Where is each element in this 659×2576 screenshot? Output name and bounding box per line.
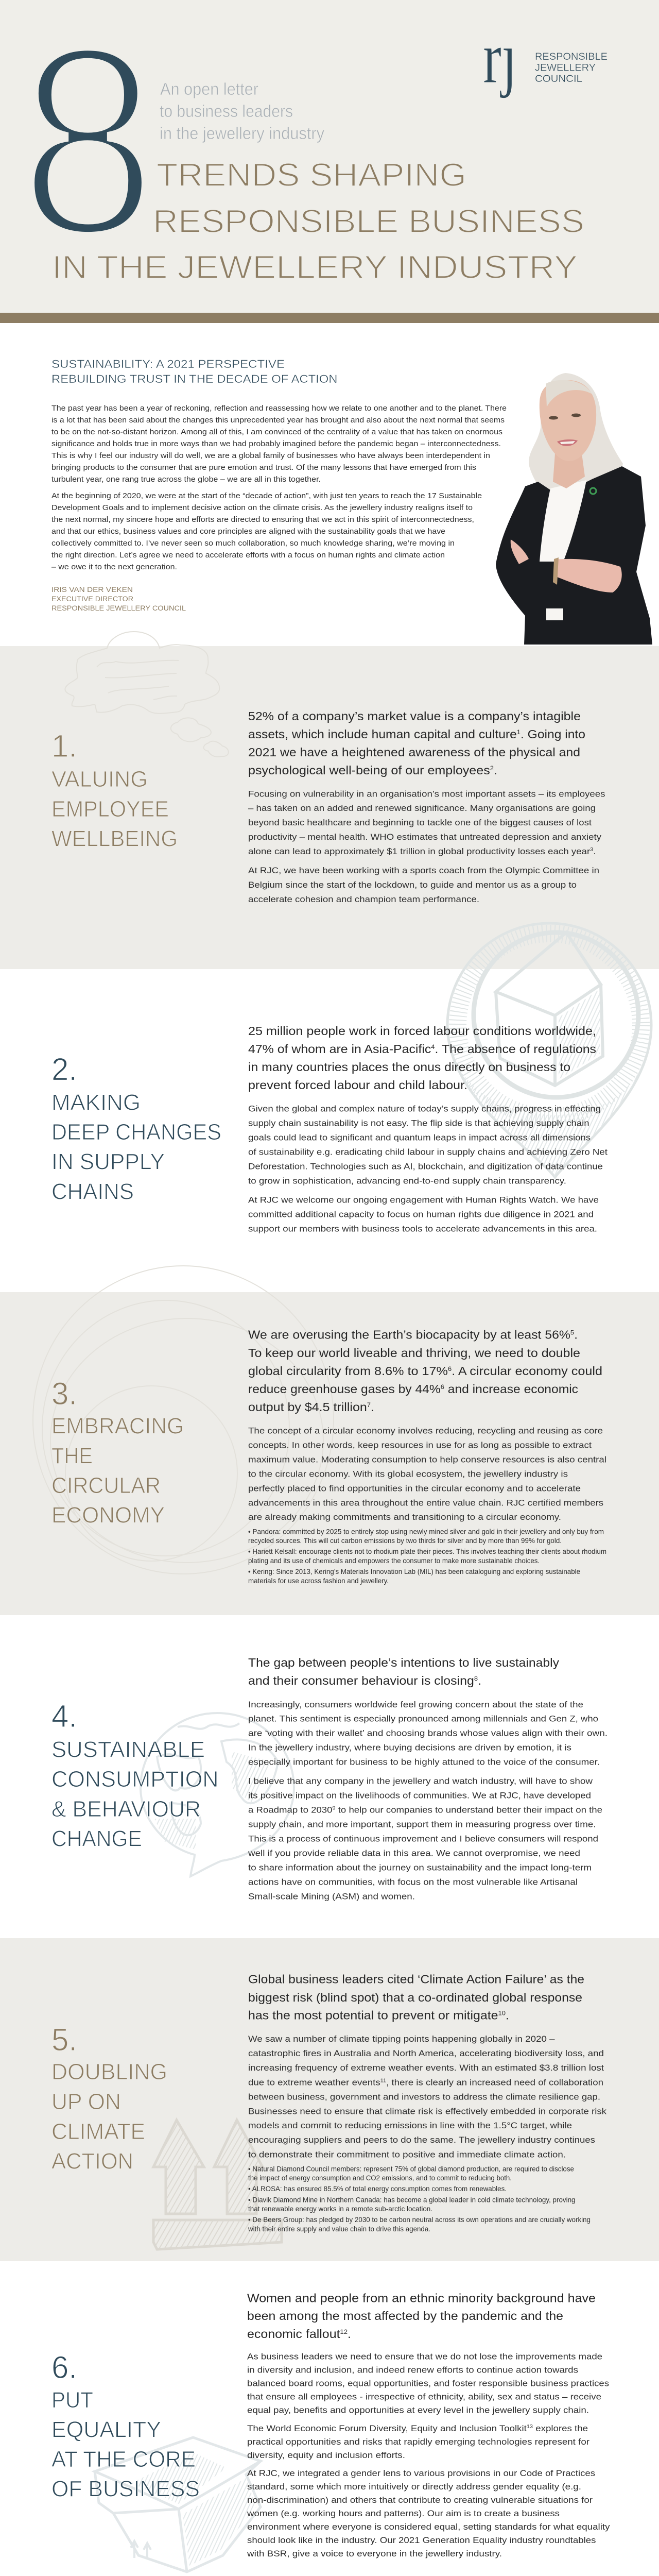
section 6 lead statement: economic fallout bbox=[247, 2327, 333, 2341]
section 5 lead statement: biggest risk (blind spot) that a co-ordinated global response bbox=[248, 1991, 582, 2004]
section 5 heading: UP ON bbox=[51, 2089, 121, 2114]
section 4 body text: to share information about the journey on sustainability and the impact long-term bbox=[248, 1863, 592, 1872]
section 3 heading bbox=[51, 1376, 184, 1528]
section 3 heading: ECONOMY bbox=[51, 1502, 165, 1528]
section 3 body text: The concept of a circular economy involves reducing, recycling and reusing as core bbox=[248, 1426, 603, 1435]
section 1 lead statement bbox=[248, 709, 585, 777]
signature: RESPONSIBLE JEWELLERY COUNCIL bbox=[51, 604, 186, 612]
section 3 member examples: materials for use across fashion and jewellery. bbox=[248, 1577, 389, 1585]
section 4 body text: especially important for business to be highly attuned to the voice of the consumer. bbox=[248, 1757, 600, 1767]
section 5 member examples: • ALROSA: has ensured 85.5% of total energy consumption comes from renewables. bbox=[248, 2184, 507, 2193]
section 6 body text: At RJC, we integrated a gender lens to various provisions in our Code of Practices bbox=[247, 2468, 595, 2478]
icon: diamond ring location pin bbox=[447, 923, 651, 1177]
section 1 body text: Focusing on vulnerability in an organisation’s most important assets – its employees bbox=[248, 789, 605, 799]
section 5 body text: models and commit to reducing emissions in line with the 1.5°C target, while bbox=[248, 2121, 572, 2130]
section 6 heading: 6. bbox=[51, 2350, 77, 2385]
section 6 heading: AT THE CORE bbox=[51, 2447, 196, 2472]
section 5 heading bbox=[51, 2022, 167, 2174]
section 2 lead statement bbox=[248, 1024, 596, 1092]
section 3 lead statement: and increase economic bbox=[444, 1382, 578, 1396]
section 6 body text: in diversity and inclusion, and indeed renew efforts to continue action towards bbox=[247, 2365, 578, 2375]
section 2 body text bbox=[248, 1104, 608, 1233]
section 2 heading: MAKING bbox=[51, 1090, 141, 1115]
section 5 member examples: with their entire supply and value chain to drive this agenda. bbox=[248, 2225, 430, 2233]
section 6 body text: with BSR, give a voice to everyone in the jewellery industry. bbox=[247, 2549, 502, 2558]
section 1 body text: accelerate cohesion and champion team performance. bbox=[248, 894, 479, 904]
section 3 lead statement: 5 bbox=[570, 1329, 574, 1336]
section 1 lead statement: 52% of a company’s market value is a company’s intagible bbox=[248, 709, 581, 723]
section 6 heading: PUT bbox=[51, 2387, 93, 2413]
section 5 lead statement: . bbox=[506, 2008, 509, 2022]
photo: portrait of Iris Van Der Veken bbox=[496, 373, 652, 645]
section 5 body text: catastrophic fires in Australia and North America, accelerating biodiversity loss, and bbox=[248, 2048, 604, 2058]
section 5 lead statement bbox=[248, 1972, 584, 2022]
section 5 heading: DOUBLING bbox=[51, 2059, 167, 2084]
section 4 heading: SUSTAINABLE bbox=[51, 1737, 205, 1762]
section 6 lead statement: Women and people from an ethnic minority background have bbox=[247, 2292, 596, 2305]
intro heading: SUSTAINABILITY: A 2021 PERSPECTIVE bbox=[51, 358, 285, 370]
section 3 heading: CIRCULAR bbox=[51, 1473, 161, 1498]
section 1 heading bbox=[51, 728, 178, 851]
logo: Responsible Jewellery Council: rȷ bbox=[483, 17, 517, 99]
section 4 body text: are ‘voting with their wallet’ and choosing brands whose values align with their own. bbox=[248, 1728, 608, 1738]
section 4 body text: planet. This sentiment is especially pronounced among millennials and Gen Z, who bbox=[248, 1714, 598, 1724]
intro letter text bbox=[51, 404, 507, 571]
section 2 body text: goals could lead to significant and quantum leaps in impact across all dimensions bbox=[248, 1132, 591, 1143]
section 4 lead statement: . bbox=[478, 1674, 481, 1687]
section 3 heading: 3. bbox=[51, 1376, 77, 1411]
section 5 heading: 5. bbox=[51, 2022, 77, 2057]
section 4 lead statement: and their consumer behaviour is closing bbox=[248, 1674, 457, 1687]
section 5 member examples: • De Beers Group: has pledged by 2030 to be carbon neutral across its own operations and are crucially working bbox=[248, 2215, 591, 2224]
section 2 lead statement: . The absence of regulations bbox=[435, 1042, 596, 1056]
section 6 lead statement: 12 bbox=[340, 2328, 348, 2335]
intro letter text: collectively committed to. I’ve never seen so much collaboration, so much knowledge sharing, we’re moving in bbox=[51, 539, 455, 548]
section 4 body text: its positive impact on the livelihoods of communities. We at RJC, have developed bbox=[248, 1791, 591, 1800]
section 2 lead statement: in many countries places the onus directly on business to bbox=[248, 1060, 570, 1074]
section 4 lead statement bbox=[248, 1656, 560, 1687]
section 4 heading: CHANGE bbox=[51, 1826, 142, 1852]
section 3 lead statement: 6 bbox=[448, 1365, 452, 1372]
section 1 heading: VALUING bbox=[51, 767, 148, 792]
intro letter text: is a lot that has been said about the changes this unprecedented year has brought and also about the next normal that seems bbox=[51, 416, 505, 425]
section 1 lead statement: 2 bbox=[490, 765, 494, 772]
section 3 lead statement: output by $4.5 trillion bbox=[248, 1400, 357, 1414]
section 1 body text: alone can lead to approximately $1 trillion in global productivity losses each year bbox=[248, 846, 559, 856]
section 1 body text: productivity – mental health. WHO estimates that untreated depression and anxiety bbox=[248, 832, 602, 842]
section 1 heading: 1. bbox=[51, 728, 77, 764]
section 6 body text: diversity, equity and inclusion efforts. bbox=[247, 2450, 405, 2460]
header: open letter strapline bbox=[160, 79, 324, 143]
section 6 body text: explores the bbox=[533, 2424, 588, 2433]
section 3 lead statement: . bbox=[574, 1328, 578, 1342]
section 3 body text: are already making commitments and transitioning to a circular economy. bbox=[248, 1512, 561, 1522]
section 5 body text: , there is clearly an increased need of collaboration bbox=[386, 2077, 603, 2088]
section 4 body text: actions have on communities, with focus on the most vulnerable like Artisanal bbox=[248, 1877, 578, 1887]
section 5 lead statement: Global business leaders cited ‘Climate Action Failure’ as the bbox=[248, 1972, 584, 1986]
section 5 body text: 11 bbox=[380, 2078, 387, 2083]
section 6 body text: As business leaders we need to ensure that we do not lose the improvements made bbox=[247, 2351, 602, 2362]
logo: Responsible Jewellery Council: COUNCIL bbox=[535, 74, 582, 84]
section 5 member examples: the impact of energy consumption and CO2 emissions, and to commit to reducing both. bbox=[248, 2174, 512, 2182]
intro letter text: At the beginning of 2020, we were at the start of the “decade of action”, with just ten years to reach the 17 Sustainable bbox=[51, 492, 482, 500]
signature: EXECUTIVE DIRECTOR bbox=[51, 595, 133, 603]
header: title bbox=[52, 157, 584, 285]
section 5 member examples: that renewable energy works in a remote sub-arctic location. bbox=[248, 2205, 432, 2213]
section 5 body text: We saw a number of climate tipping points happening globally in 2020 – bbox=[248, 2034, 555, 2044]
section 3 lead statement: global circularity from 8.6% to 17% bbox=[248, 1364, 430, 1378]
section 2 lead statement: 47% of whom are in Asia-Pacific bbox=[248, 1042, 418, 1056]
section 1 lead statement: . Going into bbox=[521, 727, 585, 741]
section 3 lead statement: To keep our world liveable and thriving, we need to double bbox=[248, 1346, 580, 1360]
section 3 body text bbox=[248, 1426, 606, 1522]
section 6 lead statement: been among the most affected by the pandemic and the bbox=[247, 2309, 563, 2323]
section 5 body text: Businesses need to ensure that climate risk is effectively embedded in corporate risk bbox=[248, 2106, 607, 2116]
section 1 body text: . bbox=[593, 846, 596, 856]
intro letter text: the right direction. Let’s agree we need to accelerate efforts with a focus on human rights and climate action bbox=[51, 551, 445, 560]
intro letter text: the next normal, my sincere hope and efforts are directed to ensuring that we act in this spirit of interconnectedness, bbox=[51, 515, 474, 524]
section 5 lead statement: 10 bbox=[498, 2009, 506, 2016]
section 4 body text: Increasingly, consumers worldwide feel growing concern about the state of the bbox=[248, 1700, 583, 1709]
section 6 body text: women (e.g. working hours and patterns). Our aim is to create a business bbox=[247, 2509, 560, 2518]
section 1 body text: At RJC, we have been working with a sports coach from the Olympic Committee in bbox=[248, 866, 599, 875]
section 5 body text: to demonstrate their commitment to positive and immediate climate action. bbox=[248, 2149, 566, 2160]
section 3 body text: advancements in this area throughout the entire value chain. RJC certified members bbox=[248, 1498, 603, 1507]
intro letter text: This is why I feel our industry will do well, we are a global family of businesses who have always been interdependent in bbox=[51, 451, 490, 460]
intro letter text: and that our ethics, business values and core principles are aligned with the sustainability goals that we have bbox=[51, 527, 445, 536]
intro letter text: significance and holds true in more ways than we had probably imagined before the pandemic began – interconnectedness. bbox=[51, 439, 501, 448]
section 3 member examples: • Kering: Since 2013, Kering’s Materials Innovation Lab (MIL) has been cataloguing and exploring sustainable bbox=[248, 1567, 580, 1575]
intro letter text: bringing products to the consumer that are pure emotion and trust. Of the many lessons that have emerged from this bbox=[51, 463, 476, 472]
section 2 heading: CHAINS bbox=[51, 1179, 134, 1205]
section 6 body text: that ensure all employees - irrespective of ethnicity, ability, sex and status – receive bbox=[247, 2392, 601, 2402]
section 6 body text: environment where everyone is considered equal, setting standards for what equality bbox=[247, 2522, 610, 2532]
header: open letter strapline: An open letter bbox=[160, 79, 258, 98]
section 3 body text: concepts. In other words, keep resources in use for as long as possible to extract bbox=[248, 1440, 592, 1450]
section 1 lead statement: . bbox=[494, 764, 497, 777]
intro letter text: Development Goals and to implement decisive action on the climate crisis. As the jewellery industry realigns itself to bbox=[51, 503, 473, 512]
section 3 member examples: recycled sources. This will cut carbon emissions by two thirds for silver and by more than 99% for gold. bbox=[248, 1536, 562, 1545]
section 3 lead statement: We are overusing the Earth’s biocapacity by at least 56% bbox=[248, 1328, 547, 1342]
section 6 body text: non-discrimination) and others that contribute to creating vulnerable situations for bbox=[247, 2495, 593, 2505]
section 3 lead statement: 6 bbox=[441, 1383, 444, 1391]
section 1 lead statement: assets, which include human capital and culture bbox=[248, 727, 499, 741]
section 4 body text bbox=[248, 1700, 608, 1901]
section 2 body text: Deforestation. Technologies such as AI, blockchain, and digitization of data continue bbox=[248, 1161, 603, 1172]
section 6 body text: balanced board rooms, equal opportunities, and foster responsible business practices bbox=[247, 2378, 609, 2388]
section 6 body text: 13 bbox=[527, 2424, 533, 2430]
section 1 heading: WELLBEING bbox=[51, 826, 178, 851]
section 2 lead statement: prevent forced labour and child labour. bbox=[248, 1078, 467, 1092]
logo: Responsible Jewellery Council bbox=[483, 17, 608, 99]
icon: open cardboard box bbox=[95, 2437, 261, 2572]
section 6 lead statement: . bbox=[348, 2327, 351, 2341]
section 6 heading: EQUALITY bbox=[51, 2417, 161, 2442]
icon: rising arrows on a box bbox=[153, 2120, 282, 2249]
signature bbox=[51, 585, 186, 612]
section 2 body text: supply chain sustainability is not easy. The flip side is that achieving supply chain bbox=[248, 1118, 589, 1128]
section 4 heading: 4. bbox=[51, 1699, 77, 1734]
section 1 body text: beyond basic healthcare and beginning to tackle one of the biggest causes of lost bbox=[248, 818, 592, 827]
section 1 heading: EMPLOYEE bbox=[51, 796, 169, 822]
logo: Responsible Jewellery Council: JEWELLERY bbox=[535, 63, 596, 73]
section 1 lead statement: psychological well-being of our employees bbox=[248, 764, 470, 777]
section 2 heading bbox=[51, 1052, 221, 1205]
section 4 body text: This is a process of continuous improvement and I believe consumers will respond bbox=[248, 1834, 598, 1843]
section 5 body text: between business, government and investors to address the climate resilience gap. bbox=[248, 2092, 600, 2102]
section 1 body text: Belgium since the start of the lockdown, to guide and mentor us as a group to bbox=[248, 880, 577, 890]
section 3 lead statement: reduce greenhouse gases by 44% bbox=[248, 1382, 428, 1396]
section 2 body text: support our members with business tools to accelerate advancements in this area. bbox=[248, 1224, 597, 1233]
section 3 member examples: • Hariett Kelsall: encourage clients not to rhodium plate their pieces. This involves teaching their clients about rhodium bbox=[248, 1547, 606, 1555]
intro heading bbox=[51, 358, 338, 385]
section 2 heading: IN SUPPLY bbox=[51, 1149, 165, 1175]
section 4 lead statement: 8 bbox=[474, 1675, 478, 1682]
section 3 heading: THE bbox=[51, 1444, 93, 1468]
section 6 lead statement bbox=[247, 2292, 596, 2341]
section 5 body text: due to extreme weather events bbox=[248, 2077, 368, 2088]
signature: IRIS VAN DER VEKEN bbox=[51, 585, 133, 594]
section 4 body text: well if you provide reliable data in this area. We cannot overpromise, we need bbox=[248, 1849, 580, 1858]
section 1 body text: 3 bbox=[590, 847, 594, 853]
section 4 heading: & BEHAVIOUR bbox=[51, 1797, 201, 1822]
section 2 heading: DEEP CHANGES bbox=[51, 1120, 221, 1145]
section 2 body text: Given the global and complex nature of today’s supply chains, progress in effecting bbox=[248, 1104, 601, 1114]
icon: circular economy rings bbox=[33, 1266, 334, 1574]
section 3 lead statement: . bbox=[371, 1400, 374, 1414]
section 6 heading bbox=[51, 2350, 200, 2502]
section 4 body text: Small-scale Mining (ASM) and women. bbox=[248, 1892, 415, 1901]
section 4 body text: supply chain, and more important, support them in measuring progress over time. bbox=[248, 1820, 596, 1829]
header: title: IN THE JEWELLERY INDUSTRY bbox=[52, 249, 578, 285]
header: title: RESPONSIBLE BUSINESS bbox=[153, 204, 584, 240]
section 2 body text: to grow in sophistication, advancing end-to-end supply chain transparency. bbox=[248, 1176, 566, 1186]
section 2 lead statement: 4 bbox=[431, 1043, 435, 1050]
section 5 lead statement: has the most potential to prevent or mitigate bbox=[248, 2008, 478, 2022]
section 2 body text: At RJC we welcome our ongoing engagement with Human Rights Watch. We have bbox=[248, 1195, 599, 1205]
section 5 body text bbox=[248, 2034, 607, 2160]
intro letter text: The past year has been a year of reckoning, reflection and reassessing how we relate to one another and to the planet. There bbox=[51, 404, 507, 413]
section 6 body text: equal pay, benefits and opportunities at every level in the jewellery supply chain. bbox=[247, 2405, 589, 2415]
section 6 body text: should look like in the industry. Our 2021 Generation Equality industry roundtables bbox=[247, 2535, 596, 2545]
intro letter text: turbulent year, one rang true across the globe – we are all in this together. bbox=[51, 475, 321, 484]
section 6 body text: practical opportunities and risks that rapidly emerging technologies represent for bbox=[247, 2437, 589, 2447]
section 4 heading bbox=[51, 1699, 218, 1852]
section 1 lead statement: 1 bbox=[517, 728, 521, 736]
section 5 member examples: • Diavik Diamond Mine in Northern Canada: has become a global leader in cold climate technology, proving bbox=[248, 2196, 576, 2204]
section 2 heading: 2. bbox=[51, 1052, 77, 1087]
section 4 body text: to help our companies to understand better their impact on the bbox=[336, 1805, 602, 1815]
section 4 heading: CONSUMPTION bbox=[51, 1767, 218, 1792]
section 3 body text: to the circular economy. With its global ecosystem, the jewellery industry is bbox=[248, 1469, 568, 1479]
icon: globe speech bubble bbox=[141, 1713, 294, 1876]
section 6 body text bbox=[247, 2351, 610, 2558]
header: title: TRENDS SHAPING bbox=[157, 157, 466, 193]
section 2 body text: of sustainability e.g. eradicating child labour in supply chains and achieving Zero Net bbox=[248, 1147, 608, 1157]
section 5 heading: ACTION bbox=[51, 2148, 133, 2174]
intro letter text: – we owe it to the next generation. bbox=[51, 563, 177, 571]
section 4 body text: a Roadmap to 2030 bbox=[248, 1805, 325, 1815]
section 5 member examples: • Natural Diamond Council members: represent 75% of global diamond production, are required to disclose bbox=[248, 2165, 574, 2173]
header: open letter strapline: to business leaders bbox=[160, 101, 293, 121]
section 5 heading: CLIMATE bbox=[51, 2119, 145, 2144]
section 2 lead statement: 25 million people work in forced labour conditions worldwide, bbox=[248, 1024, 596, 1038]
section 2 body text: committed additional capacity to focus on human rights due diligence in 2021 and bbox=[248, 1210, 594, 1219]
section 3 lead statement: 7 bbox=[367, 1401, 371, 1409]
section 1 body text: – has taken on an added and renewed significance. Many organisations are going bbox=[248, 803, 596, 813]
section 3 lead statement bbox=[248, 1328, 602, 1414]
section 5 member examples bbox=[248, 2165, 591, 2233]
section 3 member examples: plating and its use of chemicals and empowers the consumer to make more sustainable choices. bbox=[248, 1556, 540, 1565]
section 1 lead statement: 2021 we have a heightened awareness of the physical and bbox=[248, 745, 580, 759]
section 1 body text bbox=[248, 789, 605, 904]
section 5 body text: encouraging suppliers and peers to do the same. The jewellery industry continues bbox=[248, 2135, 595, 2145]
header: open letter strapline: in the jewellery industry bbox=[160, 124, 324, 143]
section 3 body text: perfectly placed to find opportunities in the circular economy and to accelerate bbox=[248, 1484, 581, 1493]
section 5 body text: increasing frequency of extreme weather events. With an estimated $3.8 trillion lost bbox=[248, 2063, 604, 2073]
section 3 body text: maximum value. Moderating consumption to help conserve resources is also central bbox=[248, 1455, 606, 1464]
intro letter text: to be on the not-so-distant horizon. Among all of this, I am convinced of the centrality of a value that has taken on enormous bbox=[51, 428, 502, 436]
intro heading: REBUILDING TRUST IN THE DECADE OF ACTION bbox=[51, 372, 338, 385]
section 3 member examples bbox=[248, 1527, 606, 1585]
section 4 body text: I believe that any company in the jewellery and watch industry, will have to show bbox=[248, 1776, 593, 1786]
section 6 body text: The World Economic Forum Diversity, Equity and Inclusion Toolkit bbox=[247, 2424, 501, 2433]
section 6 body text: standard, some which more intuitively or directly address gender equality (e.g. bbox=[247, 2482, 581, 2492]
section 3 heading: EMBRACING bbox=[51, 1414, 184, 1438]
section 6 heading: OF BUSINESS bbox=[51, 2476, 200, 2502]
section 4 body text: In the jewellery industry, where buying decisions are driven by emotion, it is bbox=[248, 1742, 571, 1753]
logo: Responsible Jewellery Council: RESPONSIBLE bbox=[535, 52, 608, 62]
section 3 member examples: • Pandora: committed by 2025 to entirely stop using newly mined silver and gold in their jewellery and only buy from bbox=[248, 1527, 604, 1535]
icon: thought cloud bbox=[65, 632, 229, 757]
section 4 lead statement: The gap between people’s intentions to live sustainably bbox=[248, 1656, 560, 1669]
section 4 body text: 9 bbox=[333, 1805, 336, 1811]
section 3 lead statement: . A circular economy could bbox=[452, 1364, 602, 1378]
